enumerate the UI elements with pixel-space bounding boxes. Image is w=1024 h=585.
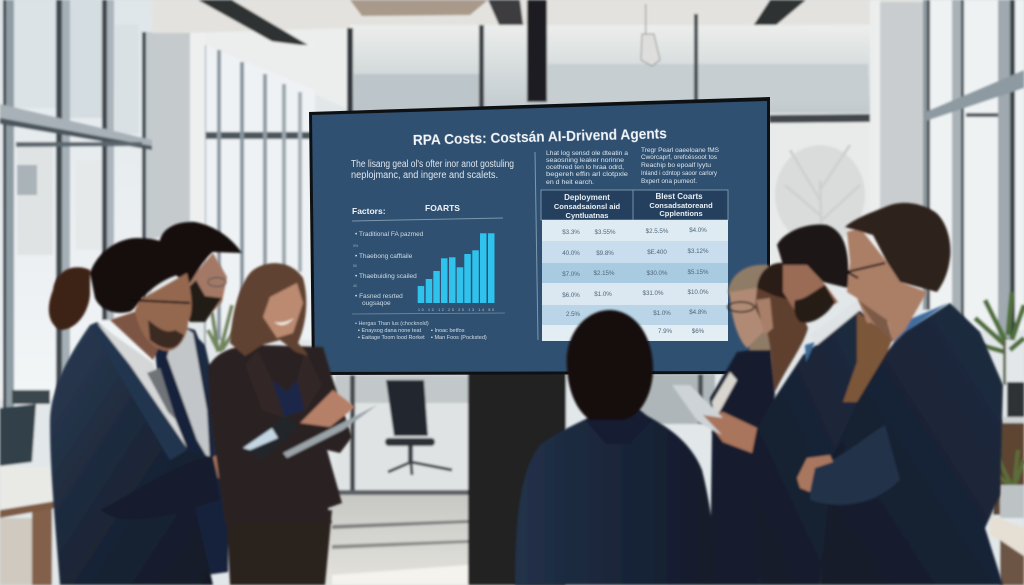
pendant lamp (641, 4, 660, 66)
left windows (0, 0, 152, 420)
table values: $7.0% (562, 271, 580, 278)
display stand (468, 372, 566, 585)
person: woman in brown jacket (208, 263, 355, 585)
person: woman with dark hair (755, 263, 808, 392)
screen paragraph left: ocethred ten lo hraa odrd, (546, 164, 624, 171)
table values: $9.8% (596, 250, 614, 257)
side window left of screen (203, 33, 340, 345)
column right (880, 2, 923, 212)
chart axis ticks (353, 244, 358, 288)
screen paragraph left: Lhat log sensd ole dteatin a (546, 150, 628, 157)
chart legend: ▪ Inoac betfos (431, 328, 465, 334)
right back window with tree (769, 114, 872, 267)
person: long brown hair woman (843, 312, 893, 402)
table header text: Deployment (564, 193, 610, 202)
table values: $31.0% (642, 290, 664, 297)
right shelf and plant (990, 417, 1024, 585)
person: woman seen from behind (515, 310, 716, 585)
chart legend: ▪ Eaitage Toom lood Rorket (358, 335, 425, 341)
ceiling vent (350, 0, 488, 16)
screen paragraph left: seaosning leaker norinne (546, 157, 624, 164)
screen paragraph left: en d heit earch. (546, 179, 594, 186)
table values: 40.0% (562, 250, 580, 257)
ceiling light strip right (740, 0, 806, 46)
inner meeting room (330, 375, 470, 495)
screen paragraph right: Tregr Pearl oaeeloane fMS (641, 147, 720, 154)
screen paragraph right (641, 147, 720, 185)
table values: $3.12% (688, 248, 709, 255)
upper support post (527, 0, 547, 102)
wall display screen (309, 97, 770, 375)
plant behind woman (208, 305, 240, 352)
table header text (554, 192, 713, 220)
screen paragraph right: Cworcaprf, orefcéssoot tos (641, 154, 718, 161)
phone in hand (243, 415, 298, 460)
floor (322, 495, 470, 585)
screen paragraph right: Bxpert ona pumeof. (641, 178, 697, 185)
chart legend: ▪ Enaysog dana none teat (358, 328, 422, 334)
table header text: Cyntluatnas (566, 211, 608, 220)
chart legend: ▪ Man Foos (Pocksted) (431, 335, 487, 341)
factor bullet list: ougsaqoe (362, 300, 391, 307)
tablet in hand (283, 405, 377, 458)
chart axis ticks: 50 (353, 264, 357, 268)
factor bullet list: • Thaebong cafftaile (355, 253, 413, 260)
factor bullet list: • Fasned resrted (355, 293, 403, 300)
screen paragraph left: begereh effin arl clotpxle (546, 171, 628, 178)
chart legend (355, 321, 487, 341)
table values: $6.0% (562, 292, 580, 299)
table values: $3.55% (594, 229, 616, 236)
table values: $4.8% (689, 309, 707, 316)
chart legend: • Hergas Than lus (chocknold) (355, 321, 429, 327)
ceiling (75, 0, 925, 33)
person: man in foreground right (797, 203, 1003, 585)
table values: $4.0% (689, 227, 707, 234)
cost table (541, 190, 728, 341)
left column (152, 33, 190, 240)
table rows (542, 220, 728, 341)
screen intro text: neplojmanc, and ingere and scalets. (351, 170, 498, 181)
bar chart (418, 233, 494, 303)
screen title: RPA Costs: Costsán AI-Drivend Agents (413, 125, 667, 149)
ceiling light strip middle (488, 0, 526, 54)
soffit wall (190, 28, 350, 110)
table values (562, 227, 709, 335)
table header text: Consadsatoreand (649, 201, 713, 210)
table values: $3.3% (562, 229, 580, 236)
window behind centre person (590, 374, 715, 424)
person: man behind left (155, 222, 242, 575)
table values: $1.0% (594, 291, 612, 298)
table values: $1.0% (653, 310, 671, 317)
table values: $30.0% (646, 270, 668, 277)
chart axis ticks: 0% (353, 244, 358, 248)
table values: $2.15% (594, 270, 615, 277)
person: woman with glasses (710, 265, 778, 585)
table values: $E.400 (647, 249, 667, 256)
back windows (347, 14, 870, 114)
office chair (385, 380, 452, 475)
table values: $2.5.5% (646, 228, 669, 235)
table values: $6% (692, 328, 705, 335)
table values: 2.5% (566, 311, 581, 318)
right plant upper (970, 292, 1024, 418)
chart axis ticks: 40 (353, 284, 357, 288)
paper held (672, 385, 723, 435)
factor bullet list: • Traditional FA pazmed (355, 231, 424, 238)
screen intro text: The lisang geal ol's ofter inor anot gostuling (351, 159, 514, 170)
table header text: Consadsaionsl aid (554, 202, 621, 211)
person: bearded man (702, 225, 880, 585)
left wooden table (0, 466, 62, 585)
right windows (923, 0, 1024, 340)
table values: $5.15% (688, 269, 709, 276)
table header text: Blest Coarts (655, 192, 703, 201)
ceiling light strip left (198, 0, 330, 66)
factors heading: Factors: (352, 206, 386, 216)
screen intro text (351, 159, 514, 181)
screen paragraph right: Reachip bo epoalf lyytu (641, 162, 711, 169)
table header text: Cpplentions (659, 209, 703, 218)
factors heading (352, 203, 460, 216)
factors heading: FOARTS (425, 203, 460, 213)
factor bullet list (355, 231, 424, 307)
table values: 7.9% (658, 328, 673, 335)
person: man with ponytail (49, 238, 297, 585)
screen paragraph right: Inland i cdntop saoor carlory (641, 170, 718, 177)
chair far left (0, 404, 36, 466)
screen paragraph left (546, 150, 628, 186)
table values: $10.0% (688, 289, 709, 296)
chart axis labels: 10 10 12 20 20 13 14 50 (418, 308, 494, 312)
people group (49, 203, 1003, 585)
factor bullet list: • Thaebuiding scailed (355, 273, 417, 280)
